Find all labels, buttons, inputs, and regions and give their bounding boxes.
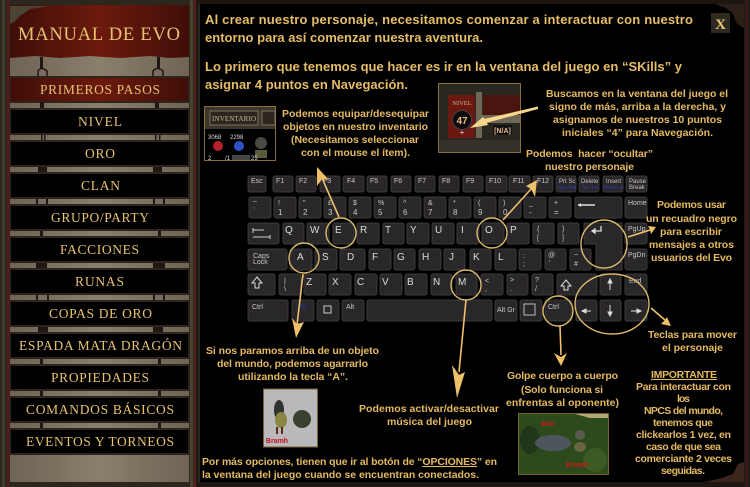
- keyboard row: function keys: Sys Rq: [558, 185, 576, 191]
- image: level screenshot: [N/A]: [494, 128, 511, 135]
- keyboard row: function keys: F2: [299, 178, 307, 185]
- menu item: Runas: [10, 269, 189, 294]
- image: level screenshot: 47: [456, 116, 468, 127]
- keyboard row: ZXCV: >: [510, 277, 514, 284]
- image: character with shield: [264, 389, 318, 447]
- arrow: E key to inventory: [317, 167, 339, 217]
- menu item: Clan: [10, 173, 189, 198]
- keyboard row: function keys: F4: [347, 178, 355, 185]
- keyboard row: ASDF: F: [372, 252, 378, 263]
- menu connectors: [36, 102, 165, 429]
- text: options note: Por más opciones, tienen que ir al botón de “OPCIONES” en: [202, 456, 497, 468]
- text: inventory note: (Necesitamos seleccionar: [291, 134, 419, 146]
- keyboard row: numbers: _: [528, 200, 533, 207]
- keyboard row: bottom: Alt Gr: [497, 307, 516, 314]
- keyboard row: ZXCV: End: [629, 278, 642, 285]
- keyboard row: QWERTY: {: [537, 226, 540, 233]
- keyboard row: ZXCV: B: [407, 277, 414, 288]
- keyboard row: function keys: F7: [418, 178, 426, 185]
- arrow: to plus sign: [470, 106, 538, 128]
- image: inventory screenshot: INVENTARIO: [212, 115, 256, 123]
- keyboard row: numbers: &: [428, 200, 433, 207]
- keyboard row: ASDF: #: [574, 261, 578, 268]
- menu item: Comandos Básicos: [10, 397, 189, 422]
- intro text: [205, 12, 693, 92]
- keyboard row: numbers: 5: [378, 208, 383, 217]
- text: pickup note: [206, 345, 379, 383]
- keyboard row: QWERTY: PgUp: [628, 226, 646, 233]
- keyboard row: QWERTY: Q: [285, 225, 293, 236]
- keyboard row: ASDF: ;: [523, 261, 525, 268]
- keyboard row: function keys: F5: [370, 178, 378, 185]
- keyboard row: ASDF: ': [549, 260, 550, 267]
- keyboard row: ZXCV: ?: [535, 277, 539, 284]
- text: pickup note: Si nos paramos arriba de un objeto: [206, 345, 379, 357]
- keyboard row: function keys: Scr Lk: [582, 185, 598, 191]
- text: options note: la ventana del juego cuando se encuentran conectados.: [202, 469, 479, 481]
- text: important note: tenemos que: [653, 417, 713, 429]
- text: music note: música del juego: [387, 416, 472, 428]
- keyboard row: QWERTY: T: [385, 225, 391, 236]
- keyboard row: ASDF: A: [297, 252, 304, 263]
- menu item: Oro: [10, 141, 189, 166]
- arrow: M key to music note: [452, 300, 466, 398]
- keyboard row: ASDF: J: [449, 252, 454, 263]
- text: movement note: el personaje: [662, 342, 723, 354]
- keyboard row: numbers: (: [478, 200, 481, 207]
- keyboard row: numbers: %: [378, 200, 384, 207]
- keyboard row: ZXCV: .: [510, 286, 512, 293]
- menu item: Grupo/Party: [10, 205, 189, 230]
- keyboard row: function keys: Break: [629, 185, 646, 191]
- menu item: Runas: RUNAS: [75, 274, 124, 289]
- keyboard row: function keys: Pause: [629, 179, 647, 185]
- keyboard row: QWERTY: ]: [562, 235, 564, 242]
- keyboard row: numbers: 1: [278, 208, 283, 217]
- menu item: Grupo/Party: GRUPO/PARTY: [51, 210, 149, 225]
- keyboard row: QWERTY: [248, 223, 647, 270]
- keyboard row: QWERTY: U: [435, 225, 442, 236]
- keyboard row: ASDF: G: [397, 252, 405, 263]
- keyboard row: numbers: [249, 197, 647, 218]
- text: important note: caso de que sea: [646, 441, 721, 453]
- text: melee note: Golpe cuerpo a cuerpo: [507, 370, 618, 382]
- keyboard row: function keys: F12: [537, 178, 549, 185]
- image: inventory screenshot: 2: [208, 156, 212, 162]
- text: important note: Para interactuar con: [636, 381, 731, 393]
- text: important note: IMPORTANTE: [651, 369, 717, 381]
- close button: [711, 13, 730, 33]
- image: wolf fight screenshot: iBOt: [541, 421, 556, 428]
- text: chat note: usuarios del Evo: [651, 252, 732, 264]
- keyboard row: ZXCV: N: [433, 277, 440, 288]
- text: hide character note: [526, 148, 653, 173]
- text: hide character note: Podemos hacer “ocultar”: [526, 148, 653, 160]
- keyboard row: ASDF: ~: [574, 252, 578, 259]
- image: level screenshot: [438, 84, 520, 152]
- text: chat note: [646, 199, 737, 264]
- keyboard row: bottom: Alt: [346, 304, 354, 311]
- text: music note: Podemos activar/desactivar: [359, 403, 499, 415]
- text: chat note: para escribir: [660, 226, 722, 238]
- keyboard row: ZXCV: /: [535, 286, 537, 293]
- keyboard row: bottom: Ctrl: [548, 304, 559, 311]
- image: inventory screenshot: 25: [251, 156, 258, 162]
- keyboard row: ZXCV: ,: [485, 286, 487, 293]
- keyboard row: function keys: F10: [489, 178, 501, 185]
- keyboard row: ZXCV: M: [458, 277, 466, 288]
- menu item: Eventos y Torneos: [10, 429, 189, 454]
- text: important note: comerciante 2 veces: [635, 453, 732, 465]
- keyboard row: function keys: Delete: [581, 179, 599, 185]
- text: melee note: [506, 370, 619, 409]
- menu item: Oro: ORO: [85, 146, 115, 161]
- keyboard row: numbers: *: [453, 200, 456, 207]
- keyboard row: ASDF: L: [498, 252, 504, 263]
- panel: main frame edges: [198, 0, 750, 487]
- menu item: Espada Mata Dragón: [10, 333, 189, 358]
- arrow: O key to hide note: [503, 180, 537, 220]
- keyboard row: ZXCV: \: [284, 286, 286, 293]
- keyboard row: ZXCV: Z: [306, 277, 312, 288]
- keyboard row: function keys: F11: [513, 178, 525, 185]
- menu item: Espada Mata Dragón: ESPADA MATA DRAGÓN: [19, 338, 182, 353]
- text: plus sign note: Buscamos en la ventana del juego el: [546, 88, 728, 100]
- keyboard row: numbers: 6: [403, 208, 408, 217]
- keyboard row: numbers: ^: [403, 200, 407, 207]
- intro text: entorno para así comenzar nuestra aventura.: [205, 30, 483, 45]
- keyboard row: numbers: 4: [353, 208, 358, 217]
- text: chat note: un recuadro negro: [646, 213, 737, 225]
- keyboard row: numbers: +: [554, 200, 558, 207]
- keyboard row: ASDF: PgDn: [628, 252, 646, 259]
- keyboard row: QWERTY: Y: [410, 225, 417, 236]
- keyboard row: numbers: ": [303, 200, 306, 207]
- keyboard: [248, 176, 647, 321]
- text: important note: los: [677, 393, 690, 405]
- keyboard row: ZXCV: V: [382, 277, 389, 288]
- keyboard row: numbers: `: [253, 208, 255, 215]
- menu item: Propiedades: [10, 365, 189, 390]
- text: pickup note: utilizando la tecla “A”.: [238, 371, 348, 383]
- keyboard row: QWERTY: }: [562, 226, 565, 233]
- keyboard row: QWERTY: P: [510, 225, 517, 236]
- menu item: Propiedades: PROPIEDADES: [51, 370, 149, 385]
- menu item: Eventos y Torneos: EVENTOS Y TORNEOS: [26, 434, 174, 449]
- keyboard row: ASDF: H: [422, 252, 429, 263]
- text: pickup note: del mundo, podemos agarrarlo: [217, 358, 368, 370]
- text: chat note: Podemos usar: [657, 199, 726, 211]
- text: chat note: mensajes a otros: [649, 239, 734, 251]
- keyboard row: ASDF: S: [322, 252, 329, 263]
- image: wolf fight screenshot: [518, 414, 608, 474]
- image: inventory screenshot: [204, 106, 276, 162]
- arrow: Ctrl key to melee note: [554, 326, 567, 366]
- keyboard row: function keys: F8: [442, 178, 450, 185]
- keyboard row: numbers: 2: [303, 208, 308, 217]
- text: plus sign note: asignamos de nuestros 10 puntos: [553, 114, 722, 126]
- text: inventory note: con el mouse el ítem).: [301, 147, 410, 159]
- keyboard row: function keys: Num Lk: [604, 185, 623, 191]
- image: inventory screenshot: 2298: [230, 135, 244, 141]
- keyboard row: ASDF: :: [523, 253, 525, 260]
- keyboard row: function keys: F9: [466, 178, 474, 185]
- keyboard row: function keys: Prt Sc: [559, 179, 575, 185]
- intro text: Al crear nuestro personaje, necesitamos comenzar a interactuar con nuestro: [205, 12, 693, 27]
- keyboard row: numbers: 3: [328, 208, 333, 217]
- menu item: Primeros Pasos: [10, 77, 189, 102]
- text: inventory note: Podemos equipar/desequipar: [282, 108, 429, 120]
- keyboard row: QWERTY: W: [310, 225, 320, 236]
- text: important note: NPCS del mundo,: [644, 405, 723, 417]
- highlight circles: [289, 218, 649, 334]
- keyboard row: ASDF: @: [548, 252, 555, 259]
- keyboard row: function keys: Insert: [606, 179, 621, 185]
- text: music note: [359, 403, 499, 428]
- arrow: Enter key to chat note: [628, 226, 656, 237]
- text: options note: [202, 456, 497, 481]
- text: plus sign note: signo de más, arriba a la derecha, y: [549, 101, 726, 113]
- text: movement note: Teclas para mover: [648, 329, 737, 341]
- keyboard row: bottom: Fn: [298, 304, 306, 311]
- image: level screenshot: NIVEL: [452, 100, 472, 107]
- keyboard row: numbers: !: [278, 200, 280, 207]
- keyboard row: numbers: -: [529, 208, 532, 217]
- keyboard row: QWERTY: I: [461, 225, 464, 236]
- keyboard row: QWERTY: O: [485, 225, 493, 236]
- title banner: Manual de Evo: MANUAL DE EVO: [18, 25, 180, 45]
- intro text: asignar 4 puntos en Navegación.: [205, 77, 408, 92]
- menu item: Nivel: NIVEL: [78, 114, 122, 129]
- keyboard row: ASDF: K: [473, 252, 480, 263]
- keyboard row: function keys: [248, 176, 647, 192]
- menu item: Nivel: [10, 109, 189, 134]
- panel: sidebar frame: [0, 0, 200, 487]
- menu item: Clan: CLAN: [81, 178, 120, 193]
- keyboard row: ASDF: D: [347, 252, 354, 263]
- keyboard row: ASDF: Lock: [253, 259, 268, 266]
- keyboard row: function keys: Esc: [251, 178, 263, 185]
- text: important note: seguidas.: [661, 465, 705, 477]
- menu item: Facciones: [10, 237, 189, 262]
- image: wolf fight screenshot: Bramh: [566, 462, 588, 469]
- keyboard row: ASDF: [248, 249, 647, 270]
- keyboard row: ZXCV: <: [485, 278, 489, 285]
- keyboard row: QWERTY: [: [537, 235, 539, 242]
- keyboard row: QWERTY: E: [335, 225, 342, 236]
- text: melee note: enfrentas al oponente): [506, 397, 619, 409]
- menu item: Facciones: FACCIONES: [60, 242, 139, 257]
- keyboard row: function keys: F1: [276, 178, 284, 185]
- keyboard row: numbers: £: [328, 200, 332, 207]
- keyboard row: numbers: ): [503, 200, 505, 207]
- menu item: Copas de Oro: COPAS DE ORO: [49, 306, 152, 321]
- image: character with shield: Bramh: [266, 438, 288, 445]
- menu item: Primeros Pasos: PRIMEROS PASOS: [40, 82, 160, 97]
- text: plus sign note: iniciales “4” para Navegación.: [562, 127, 713, 139]
- text: inventory note: [282, 108, 429, 159]
- intro text: Lo primero que tenemos que hacer es ir en la ventana del juego en “SKills” y: [205, 59, 683, 74]
- title banner: Manual de Evo: [10, 5, 189, 76]
- keyboard row: bottom: [248, 300, 647, 321]
- arrow: arrow keys to movement note: [651, 308, 671, 326]
- keyboard row: ZXCV: |: [284, 278, 286, 285]
- text: hide character note: nuestro personaje: [545, 161, 634, 173]
- keyboard row: ZXCV: [248, 274, 647, 295]
- keyboard row: ASDF: Caps: [253, 253, 270, 260]
- keyboard row: numbers: $: [353, 200, 357, 207]
- text: movement note: [648, 329, 737, 354]
- text: plus sign note: [546, 88, 728, 139]
- close button: X: [715, 17, 726, 33]
- text: melee note: (Solo funciona si: [521, 384, 603, 396]
- image: inventory screenshot: /1: [225, 156, 231, 162]
- keyboard row: numbers: 7: [428, 208, 433, 217]
- keyboard row: function keys: F6: [394, 178, 402, 185]
- keyboard row: QWERTY: R: [360, 225, 367, 236]
- keyboard row: function keys: F3: [323, 178, 331, 185]
- arrow: A key to pickup note: [292, 274, 304, 338]
- menu item: Copas de Oro: [10, 301, 189, 326]
- text: important note: clickearlos 1 vez, en: [636, 429, 731, 441]
- keyboard row: ZXCV: C: [357, 277, 364, 288]
- image: level screenshot: +: [460, 128, 465, 137]
- keyboard row: numbers: 0: [503, 208, 508, 217]
- keyboard row: ZXCV: X: [332, 277, 339, 288]
- text: important note: [635, 369, 732, 477]
- keyboard row: numbers: ~: [253, 199, 257, 206]
- keyboard row: numbers: 9: [478, 208, 483, 217]
- text: inventory note: objetos en nuestro inventario: [283, 121, 428, 133]
- keyboard row: bottom: Ctrl: [252, 304, 263, 311]
- image: inventory screenshot: 3068: [208, 135, 222, 141]
- menu item: Comandos Básicos: COMANDOS BÁSICOS: [26, 402, 174, 417]
- keyboard row: numbers: =: [554, 208, 559, 217]
- keyboard row: numbers: 8: [453, 208, 458, 217]
- keyboard row: numbers: Home: [628, 200, 647, 207]
